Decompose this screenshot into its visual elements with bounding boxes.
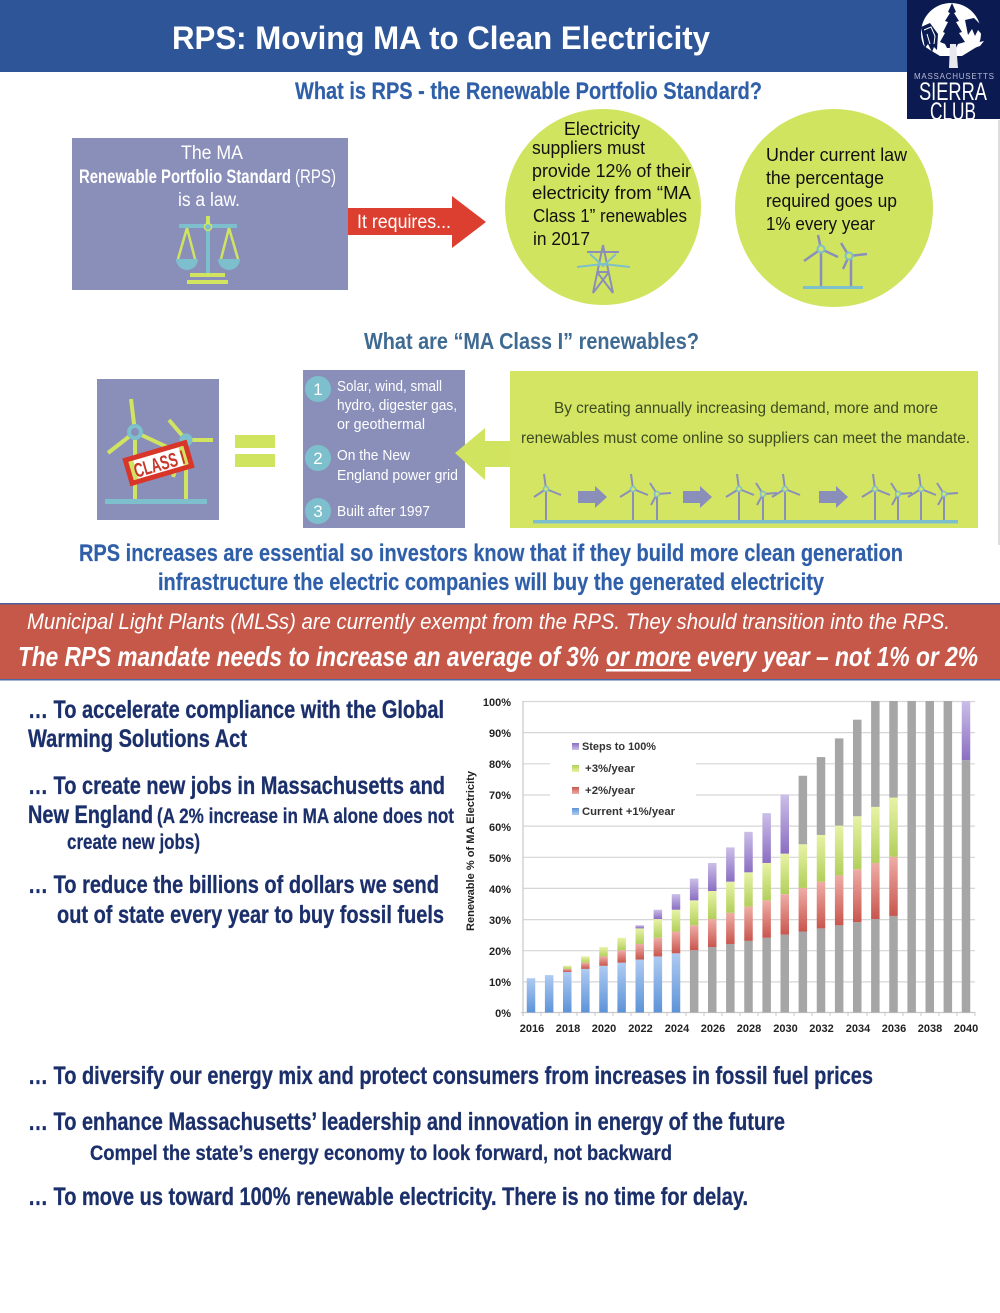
logo: Massachusetts Sierra Club [907, 0, 1000, 126]
faint right edge line [998, 120, 1000, 545]
bar chart: renewable percent of MA electricity [465, 697, 978, 1035]
text block: reasons top: create new jobs) [67, 830, 200, 854]
panel: RPS is a law: The MA [181, 143, 243, 164]
legend: Steps to 100% [582, 741, 656, 753]
arrow: left pointing [455, 428, 510, 480]
panel: class I criteria: 3 [313, 502, 323, 521]
panel: RPS is a law: is a law. [178, 190, 240, 211]
y axis labels: 90% [489, 728, 511, 740]
text block: reasons bottom: Compel the state’s energy economy to look forward, not backward [90, 1141, 672, 1165]
y axis labels: 80% [489, 759, 511, 771]
equals sign [235, 435, 275, 467]
panel: class I criteria: 1 [313, 380, 323, 399]
logo: Massachusetts Sierra Club: MASSACHUSETTS [914, 72, 994, 81]
red banner: The RPS mandate needs to increase an average of 3% [18, 641, 599, 672]
text block: reasons top: … To accelerate compliance with the Global [28, 696, 444, 724]
panel: class I criteria: On the New [337, 447, 410, 464]
circle: 12% requirement: in 2017 [533, 229, 590, 249]
text block: reasons top: out of state every year to buy fossil fuels [57, 901, 444, 929]
stamp: class I: CLASS I [131, 447, 188, 483]
y axis title: Renewable % of MA Electricity [465, 770, 477, 931]
circle: 12% requirement: provide 12% of their [532, 161, 691, 181]
circle: 1% every year: required goes up [766, 191, 897, 211]
logo: Massachusetts Sierra Club: CLUB [930, 98, 976, 126]
red banner: Municipal Light Plants (MLSs) are currently exempt from the RPS. They should transition into the RPS. [27, 609, 950, 634]
y axis labels: 70% [489, 790, 511, 802]
panel: RPS is a law: (RPS) [295, 167, 336, 188]
text block: reasons bottom [28, 1062, 873, 1211]
circle: 1% every year: the percentage [766, 168, 884, 188]
circle: 12% requirement: electricity from “MA [532, 183, 691, 203]
panel: class I criteria: or geothermal [337, 416, 425, 433]
x axis labels: 2036 [882, 1023, 906, 1035]
x axis labels: 2032 [809, 1023, 834, 1035]
text block: reasons bottom: … To move us toward 100% renewable electricity. There is no time for delay. [28, 1183, 748, 1211]
stamp: class I [125, 443, 192, 484]
icon: wind turbines [803, 235, 867, 289]
x axis labels: 2024 [665, 1023, 690, 1035]
text block: reasons top: … To create new jobs in Massachusetts and [28, 772, 445, 800]
circle: 1% every year: 1% every year [766, 214, 875, 234]
arrow: it requires: It requires... [357, 212, 451, 233]
panel: RPS is a law [72, 138, 348, 290]
legend: +3%/year [585, 763, 636, 775]
panel: class I criteria: 2 [313, 449, 323, 468]
icon: scales of justice [176, 216, 240, 284]
x axis labels: 2016 [520, 1023, 544, 1035]
panel: class I criteria: England power grid [337, 467, 458, 484]
panel: class I criteria: hydro, digester gas, [337, 397, 457, 414]
panel: increasing demand: renewables must come online so suppliers can meet the mandate. [521, 430, 970, 447]
legend: Current +1%/year [582, 806, 676, 818]
heading: MA Class I renewables: What are “MA Class I” renewables? [364, 328, 699, 354]
red banner [0, 603, 1000, 680]
legend: +2%/year [585, 785, 636, 797]
icon row: growing wind turbines [533, 474, 958, 524]
y axis labels [483, 697, 511, 1020]
x axis labels [520, 1023, 978, 1035]
header banner [0, 0, 907, 72]
panel: increasing demand: By creating annually increasing demand, more and more [554, 400, 938, 417]
y axis labels: 40% [489, 884, 511, 896]
x axis labels: 2034 [846, 1023, 871, 1035]
x axis labels: 2038 [918, 1023, 942, 1035]
y axis labels: 30% [489, 915, 511, 927]
statement: investors [79, 540, 903, 596]
text block: reasons top [28, 696, 454, 929]
panel: class I criteria: Built after 1997 [337, 503, 430, 520]
statement: investors: infrastructure the electric companies will buy the generated electricity [158, 569, 824, 596]
y axis labels: 100% [483, 697, 511, 709]
y axis labels: 10% [489, 977, 511, 989]
x axis labels: 2040 [954, 1023, 978, 1035]
y axis labels: 20% [489, 946, 511, 958]
x axis labels: 2028 [737, 1023, 761, 1035]
text block: reasons bottom: … To enhance Massachusetts’ leadership and innovation in energy of the future [28, 1108, 785, 1136]
y axis labels: 60% [489, 822, 511, 834]
heading: what is RPS: What is RPS - the Renewable Portfolio Standard? [295, 78, 762, 105]
text block: reasons top: New England [28, 801, 153, 829]
x axis labels: 2030 [773, 1023, 798, 1035]
title: RPS: Moving MA to Clean Electricity [172, 20, 710, 56]
arrow: it requires [348, 196, 486, 248]
red banner: or more [606, 641, 691, 672]
panel: class I criteria [303, 370, 465, 528]
y axis labels: 50% [489, 853, 511, 865]
circle: 1% every year [735, 109, 933, 307]
panel: class I criteria: Solar, wind, small [337, 378, 442, 395]
circle: 12% requirement: Class 1” renewables [533, 206, 687, 226]
circle: 12% requirement [505, 109, 701, 305]
y axis labels: 0% [495, 1008, 511, 1020]
panel: RPS is a law: Renewable Portfolio Standard [79, 167, 291, 188]
text block: reasons top: (A 2% increase in MA alone does not [157, 804, 454, 828]
x axis labels: 2022 [628, 1023, 653, 1035]
gridlines and axes [521, 701, 975, 1016]
panel: increasing demand [510, 371, 978, 528]
panel: class I icon [97, 379, 219, 520]
circle: 12% requirement: Electricity [564, 119, 640, 139]
text block: reasons top: … To reduce the billions of dollars we send [28, 871, 439, 899]
x axis labels: 2026 [701, 1023, 725, 1035]
circle: 12% requirement: suppliers must [532, 138, 645, 158]
x axis labels: 2020 [592, 1023, 616, 1035]
legend [572, 741, 676, 818]
icon: transmission tower [577, 245, 630, 293]
text block: reasons top: Warming Solutions Act [28, 725, 248, 753]
circle: 1% every year: Under current law [766, 145, 908, 165]
stacked bars [527, 701, 970, 1012]
x axis labels: 2018 [556, 1023, 580, 1035]
